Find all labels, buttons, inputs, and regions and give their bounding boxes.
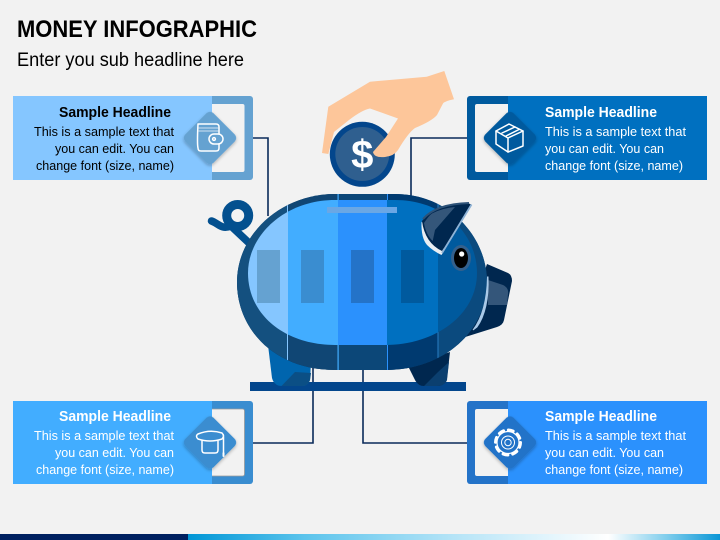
text: bottom right: you can edit. You can xyxy=(545,445,664,460)
pig tail xyxy=(212,204,249,242)
icon: piggy bank xyxy=(212,190,512,391)
icon: gear xyxy=(482,414,538,471)
pig cheek highlight xyxy=(473,277,488,330)
panel: top right card xyxy=(467,96,707,180)
text: top right: you can edit. You can xyxy=(545,141,664,156)
text: bottom right: Sample Headline xyxy=(545,409,657,425)
text: top left: you can edit. You can xyxy=(55,141,174,156)
text: bottom right: change font (size, name) xyxy=(545,462,683,477)
text: bottom left: change font (size, name) xyxy=(36,462,174,477)
pig ear xyxy=(421,203,472,255)
text: bottom right: This is a sample text that xyxy=(545,428,686,443)
icon: wallet xyxy=(182,110,238,166)
text: top right: Sample Headline xyxy=(545,105,657,121)
text: top right xyxy=(545,105,686,173)
text: bottom left: you can edit. You can xyxy=(55,445,174,460)
coin slot xyxy=(327,207,397,213)
text: top right: This is a sample text that xyxy=(545,124,686,139)
icon: dollar coin xyxy=(330,122,395,187)
text: bottom left xyxy=(34,409,174,477)
icon: dollar coin: $ xyxy=(351,133,373,177)
connector lines xyxy=(253,138,467,443)
pig legs xyxy=(268,345,450,386)
pig snout xyxy=(462,264,512,338)
text: top left xyxy=(34,105,174,173)
panel: bottom right card xyxy=(467,401,707,484)
panel: bottom left card xyxy=(13,401,253,484)
icon: hand xyxy=(322,71,454,157)
footer bar xyxy=(0,534,720,540)
title: MONEY INFOGRAPHIC xyxy=(17,16,257,43)
text: bottom left: This is a sample text that xyxy=(34,428,174,443)
pig eye xyxy=(451,245,471,271)
panel: top left card xyxy=(13,96,253,180)
subtitle: Enter you sub headline here xyxy=(17,50,244,71)
text: bottom left: Sample Headline xyxy=(59,409,171,425)
text: top left: Sample Headline xyxy=(59,105,171,121)
icon: graduation cap xyxy=(182,414,238,471)
text: top left: change font (size, name) xyxy=(36,158,174,173)
pig body xyxy=(237,190,488,376)
pig base bar xyxy=(250,382,466,391)
icon: box xyxy=(482,110,538,166)
pig panel windows xyxy=(257,250,424,303)
text: bottom right xyxy=(545,409,686,477)
text: top right: change font (size, name) xyxy=(545,158,683,173)
text: top left: This is a sample text that xyxy=(34,124,174,139)
